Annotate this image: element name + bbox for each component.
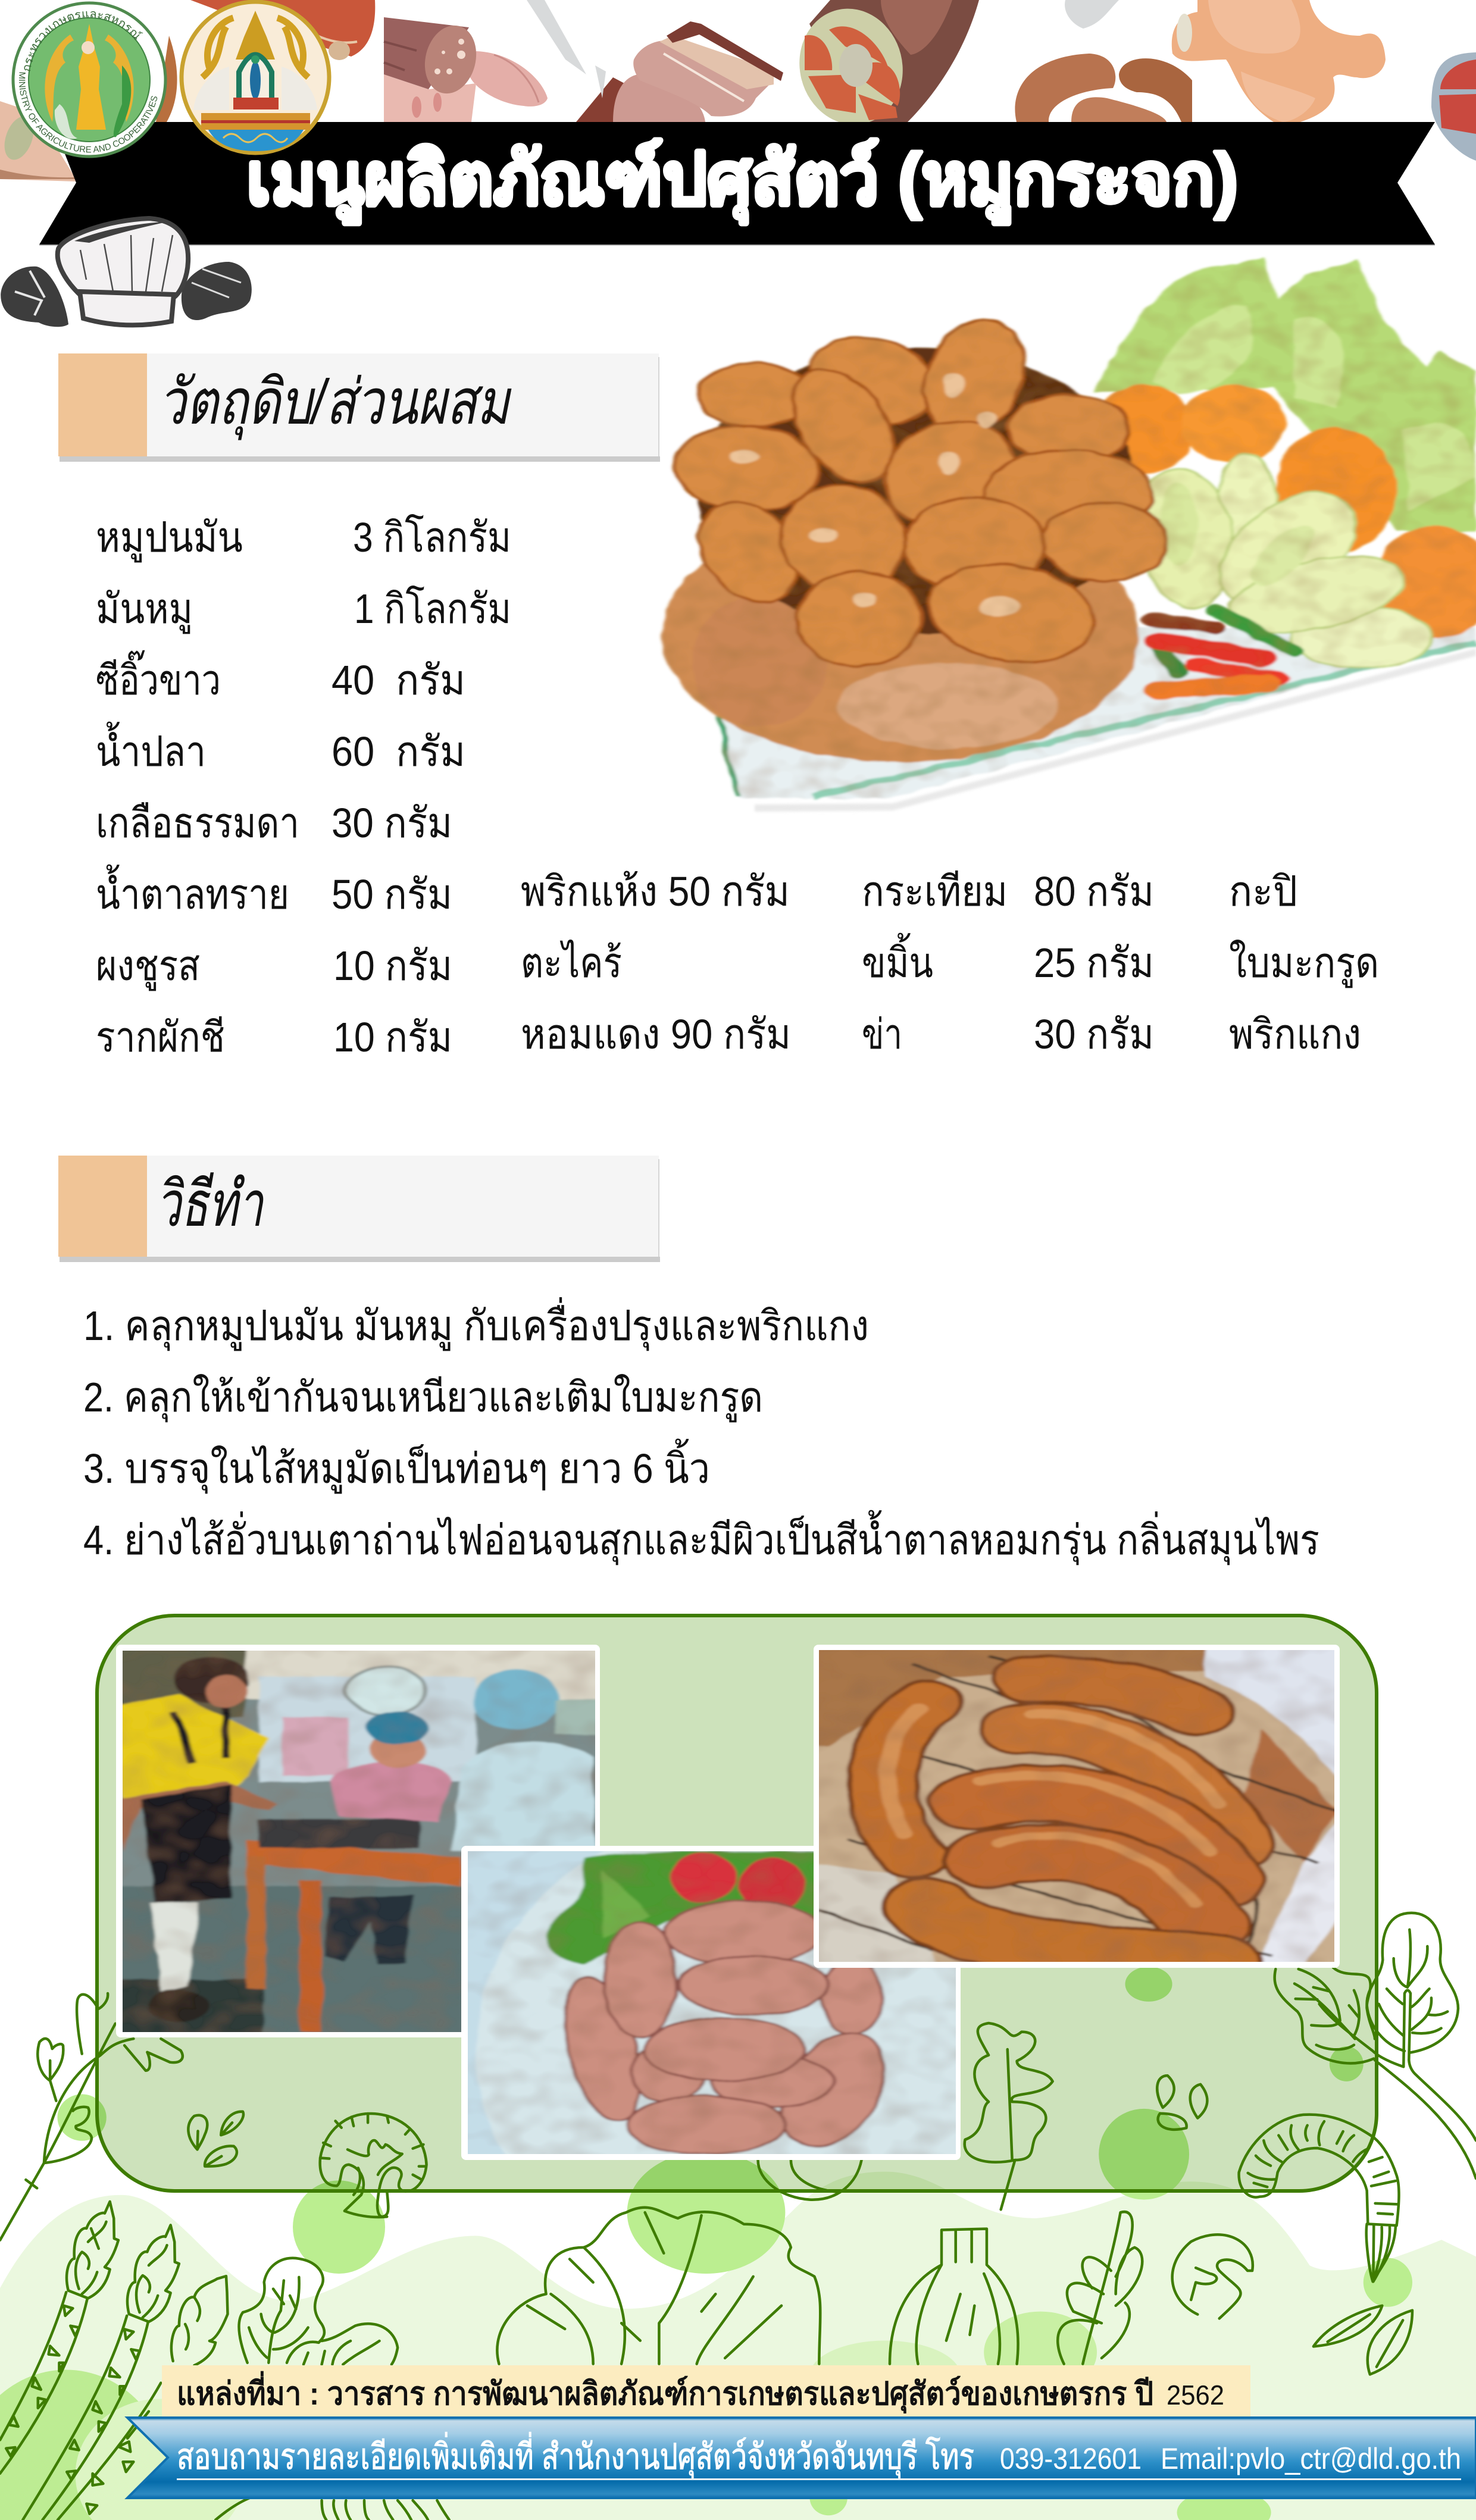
column 1 amounts: 30 กรัม (332, 800, 452, 846)
column 1 amounts: 3 กิโลกรัม (353, 514, 511, 561)
method steps: 1. คลุกหมูปนมัน มันหมู กับเครื่องปรุงและพริกแกง (83, 1297, 869, 1351)
source credit bar (162, 2365, 1250, 2416)
logo: Ministry of Agriculture and Cooperatives: กระทรวงเกษตรและสหกรณ์ (24, 11, 143, 71)
column 1 amounts: 60 กรัม (332, 728, 465, 775)
column 2: หอมแดง 90 กรัม (521, 1011, 791, 1057)
column 1 amounts (332, 514, 511, 1060)
sausage slices (664, 315, 1168, 682)
icon: chef hat with two meats (1, 218, 252, 327)
cucumber slices (1215, 453, 1278, 583)
utensils: faint grey sketches (527, 0, 1119, 98)
plants: right spinach, shrimp-shaped bean and vine (1239, 1913, 1476, 2281)
panel heading: method: วิธีทำ (156, 1169, 264, 1239)
left meat (1, 267, 68, 327)
panel heading: ingredients: วัตถุดิบ/ส่วนผสม (158, 367, 512, 440)
photo shadow under plate (755, 649, 1476, 812)
column 1 items: รากผักชี (96, 1014, 225, 1060)
method steps: 3. บรรจุในไส้หมูมัดเป็นท่อนๆ ยาว 6 นิ้ว (83, 1438, 710, 1494)
column 3 (862, 868, 1154, 1057)
method steps: 4. ย่างไส้อั่วบนเตาถ่านไฟอ่อนจนสุกและมีผิวเป็นสีน้ำตาลหอมกรุ่น กลิ่นสมุนไพร (83, 1510, 1319, 1566)
background: light green waves and blobs (0, 1967, 1476, 2520)
logo: Ministry of Agriculture and Cooperatives (12, 1, 167, 158)
column 1 items: น้ำตาลทราย (96, 864, 289, 918)
panel heading: ingredients (58, 353, 660, 462)
hat band (80, 292, 174, 325)
meat: left cut behind logos (0, 36, 177, 181)
column 4: พริกแกง (1229, 1011, 1361, 1057)
plants: centre lettuce, zucchini, rosemary, oak leaf and mushroom (497, 2023, 1412, 2374)
column 4: กะปิ (1229, 868, 1297, 915)
ingredient list (96, 514, 1379, 1060)
lettuce (1095, 256, 1476, 531)
meat: ham with rind (576, 21, 783, 122)
column 1 amounts: 1 กิโลกรัม (354, 585, 511, 632)
banner ribbon (39, 122, 1435, 245)
meat: ham leg with cut face (787, 0, 979, 136)
chilies (1152, 621, 1215, 627)
meat: right edge ham (1431, 52, 1476, 161)
column 3: กระเทียม (862, 868, 1008, 915)
panel heading: method (58, 1156, 660, 1262)
column 1 amounts: 10 กรัม (333, 1014, 452, 1060)
column 2: พริกแห้ง 50 กรัม (521, 868, 790, 915)
photo: raw sausages on a plate (461, 1846, 961, 2160)
column 4 (1229, 868, 1379, 1057)
carrots (1095, 384, 1194, 474)
meat: red steak (190, 0, 375, 60)
source credit bar: แหล่งที่มา : วารสาร การพัฒนาผลิตภัณฑ์การเกษตรและปศุสัตว์ของเกษตรกร ปี (177, 2371, 1153, 2414)
logo: Department of Livestock Development (182, 2, 329, 153)
column 3: ขมิ้น (862, 932, 933, 986)
title banner (39, 122, 1435, 246)
column 1 amounts: 10 กรัม (333, 943, 452, 989)
contact ribbon (127, 2418, 1476, 2498)
photo: grilled sausages on a rack (810, 1642, 1356, 1974)
column 3: 25 กรัม (1034, 940, 1154, 986)
column 1 items: ซีอิ๊วขาว (96, 650, 221, 703)
plate (717, 627, 1476, 798)
column 4: ใบมะกรูด (1229, 939, 1379, 988)
method steps: 2. คลุกให้เข้ากันจนเหนียวและเติมใบมะกรูด (83, 1373, 763, 1423)
vegetable line art (0, 1913, 1476, 2520)
panel: green photo frame (97, 1616, 1377, 2191)
photo: workers preparing sausages (113, 1642, 612, 2043)
column 3: 30 กรัม (1034, 1011, 1154, 1057)
contact ribbon: สอบถามรายละเอียดเพิ่มเติมที่ สำนักงานปศุสัตว์จังหวัดจันทบุรี โทร (177, 2432, 974, 2478)
column 2: ตะไคร้ (521, 940, 622, 986)
column 1 items: ผงชูรส (96, 943, 200, 991)
title text: เมนูผลิตภัณฑ์ปศุสัตว์ (หมูกระจก) (246, 139, 1238, 224)
column 3: 80 กรัม (1034, 868, 1154, 915)
logo: Ministry of Agriculture and Cooperatives: MINISTRY OF AGRICULTURE AND COOPERATIVES (19, 73, 157, 152)
column 1 items: มันหมู (96, 586, 193, 634)
plants: left vine, asparagus, mushroom, small leaves and spinach (0, 1993, 449, 2520)
column 1 items: เกลือธรรมดา (96, 800, 299, 846)
slice highlights (728, 372, 1021, 617)
column 1 items: น้ำปลา (96, 721, 206, 775)
source credit bar: 2562 (1167, 2380, 1224, 2411)
photo: sliced sausage with vegetables (662, 256, 1476, 798)
illustration: meat strip background (0, 0, 1476, 181)
column 1 amounts: 50 กรัม (332, 871, 452, 918)
hat crown (58, 218, 188, 298)
method steps (83, 1297, 1319, 1566)
contact ribbon: 039-312601 (1000, 2442, 1142, 2475)
meat: salami and pink slices (384, 17, 548, 122)
column 1 items: หมูปนมัน (96, 514, 243, 563)
column 3: ข่า (862, 1011, 902, 1057)
column 1 items (96, 514, 299, 1060)
meat: chicken leg (1172, 0, 1386, 122)
meat: sausage ring (1015, 54, 1192, 122)
right meat (182, 262, 252, 320)
large sausage coil (662, 506, 1139, 762)
column 1 amounts: 40 กรัม (332, 657, 465, 703)
column 2 (521, 868, 791, 1057)
